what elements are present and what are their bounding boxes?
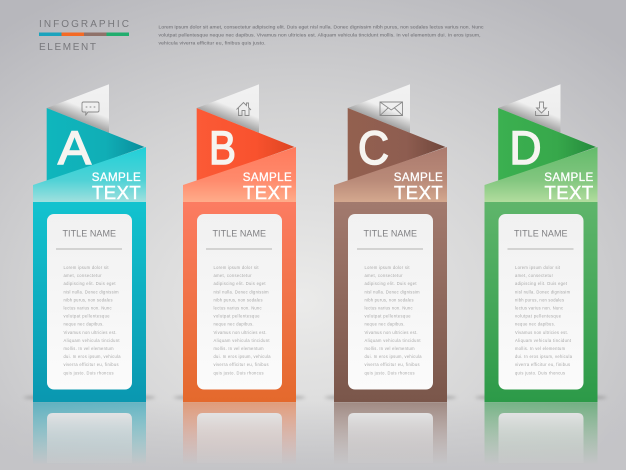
folded triangle (498, 108, 596, 182)
panel body text: Vivamus non ultricies est. (515, 330, 568, 335)
column A (24, 84, 156, 465)
panel body text: viverra efficitur eu, finibus (214, 362, 268, 367)
sample text: TEXT (243, 182, 292, 203)
panel body text: adipiscing elit. Duis eget (214, 281, 266, 286)
white text panel (348, 214, 433, 390)
intro paragraph: vehicula viverra efficitur eu, finibus quis justo. (158, 40, 266, 46)
body band (484, 202, 598, 402)
icon flag (47, 84, 109, 133)
panel body text: Lorem ipsum dolor sit (364, 265, 410, 270)
floor shadow (174, 395, 306, 400)
sample text: TEXT (544, 182, 593, 203)
panel title: TITLE NAME (364, 228, 417, 238)
floor shadow (24, 395, 156, 400)
panel body text: Lorem ipsum dolor sit (515, 265, 561, 270)
panel body text (214, 265, 271, 375)
panel body text: volutpat pellentesque (515, 314, 562, 319)
white text panel (498, 214, 584, 390)
panel body text (515, 265, 573, 375)
column C (324, 84, 456, 465)
sample text (92, 171, 141, 203)
icon: download (536, 102, 548, 116)
body band (183, 202, 296, 402)
panel body text: adipiscing elit. Duis eget (64, 281, 116, 286)
floor shadow (324, 395, 456, 400)
reflection (484, 403, 598, 465)
intro paragraph: volutpat pellentesque neque nec dapibus. Vivamus non ultricies est. Aliquam vehicula tincidunt mollis. In vel elementum dui. In eros ipsum, (158, 32, 480, 38)
panel body text: dui. In eros ipsum, vehicula (515, 354, 573, 359)
panel body text: viverra efficitur eu, finibus (364, 362, 420, 367)
panel body text: lectus varius non. Nunc (64, 306, 112, 310)
panel body text: lectus varius non. Nunc (364, 306, 412, 310)
reflection (334, 403, 447, 465)
front fold (183, 147, 296, 202)
heading: infographic element: INFOGRAPHIC (39, 19, 129, 30)
folded triangle (197, 108, 294, 182)
letter C: C (358, 121, 389, 174)
panel body text: Aliquam vehicula tincidunt (214, 338, 270, 343)
panel body text: Vivamus non ultricies est. (214, 330, 266, 335)
panel body text: amet, consectetur (515, 273, 554, 278)
panel body text: adipiscing elit. Duis eget (515, 281, 568, 286)
panel body text: Aliquam vehicula tincidunt (364, 338, 421, 343)
sample text (544, 171, 593, 203)
panel body text: quis justo. Duis rhoncus (364, 370, 414, 375)
panel body text: viverra efficitur eu, finibus (515, 362, 570, 367)
icon flag (197, 84, 259, 133)
letter A: A (58, 121, 92, 174)
white text panel (47, 214, 132, 390)
column D (475, 84, 607, 465)
panel body text: lectus varius non. Nunc (214, 306, 262, 310)
panel body text: nibh purus, non sodales (64, 297, 112, 302)
heading: infographic element (39, 19, 129, 53)
icon flag (348, 84, 410, 133)
panel body text: amet, consectetur (64, 273, 102, 278)
colour bar (39, 32, 129, 36)
panel body text: neque nec dapibus. (214, 322, 254, 327)
intro paragraph (158, 24, 484, 46)
front fold (484, 147, 598, 202)
sample text (394, 171, 443, 203)
panel body text: dui. In eros ipsum, vehicula (214, 354, 271, 359)
panel body text (64, 265, 121, 375)
panel body text: volutpat pellentesque (364, 314, 411, 319)
white text panel (197, 214, 282, 390)
panel body text: nibh purus, non sodales (364, 297, 414, 302)
panel body text: Lorem ipsum dolor sit (64, 265, 109, 270)
sample text: SAMPLE (394, 171, 443, 184)
folded triangle (47, 108, 145, 182)
reflection (183, 403, 296, 465)
panel body text: quis justo. Duis rhoncus (214, 370, 264, 375)
letter B: B (209, 121, 236, 174)
body band (33, 202, 146, 402)
body band (334, 202, 447, 402)
icon: envelope (380, 102, 402, 116)
front fold (33, 147, 146, 202)
panel body text: viverra efficitur eu, finibus (64, 362, 118, 367)
panel body text: Lorem ipsum dolor sit (214, 265, 259, 270)
icon: house (236, 102, 251, 116)
panel body text: quis justo. Duis rhoncus (64, 370, 114, 375)
panel body text: dui. In eros ipsum, vehicula (64, 354, 121, 359)
sample text (243, 171, 292, 203)
panel body text: mollis. In vel elementum (214, 346, 264, 351)
sample text: SAMPLE (243, 171, 292, 184)
sample text: SAMPLE (544, 171, 593, 184)
panel body text: neque nec dapibus. (364, 322, 404, 327)
panel body text: mollis. In vel elementum (64, 346, 114, 351)
panel body text: Aliquam vehicula tincidunt (515, 338, 572, 343)
folded triangle (348, 108, 446, 182)
panel title: TITLE NAME (212, 228, 266, 238)
panel body text: nibh purus, non sodales (214, 297, 262, 302)
intro paragraph: Lorem ipsum dolor sit amet, consectetur adipiscing elit. Duis eget nisl nulla. Donec dignissim nibh purus, non sodales lectus varius non. Nunc (158, 24, 484, 30)
panel body text: neque nec dapibus. (64, 322, 104, 327)
panel body text: lectus varius non. Nunc (515, 306, 563, 310)
reflection (33, 403, 146, 465)
panel body text: Vivamus non ultricies est. (64, 330, 116, 335)
panel body text: nisl nulla. Donec dignissim (515, 289, 571, 294)
panel title: TITLE NAME (62, 228, 116, 238)
panel body text: amet, consectetur (214, 273, 252, 278)
letter D: D (510, 121, 542, 174)
panel body text: neque nec dapibus. (515, 322, 555, 327)
panel body text: quis justo. Duis rhoncus (515, 370, 565, 375)
panel body text: Vivamus non ultricies est. (364, 330, 418, 335)
floor shadow (475, 395, 607, 400)
column B (174, 84, 306, 465)
panel body text: dui. In eros ipsum, vehicula (364, 354, 422, 359)
panel body text: nisl nulla. Donec dignissim (214, 289, 269, 294)
panel body text: nisl nulla. Donec dignissim (364, 289, 420, 294)
panel body text (364, 265, 422, 375)
front fold (334, 147, 447, 202)
sample text: TEXT (394, 182, 443, 203)
panel body text: Aliquam vehicula tincidunt (64, 338, 120, 343)
panel body text: adipiscing elit. Duis eget (364, 281, 417, 286)
heading: infographic element: ELEMENT (39, 42, 96, 53)
panel body text: volutpat pellentesque (214, 314, 260, 319)
panel body text: mollis. In vel elementum (364, 346, 415, 351)
icon flag (498, 84, 560, 133)
panel body text: nisl nulla. Donec dignissim (64, 289, 119, 294)
panel title: TITLE NAME (514, 228, 568, 238)
icon: chat bubble (82, 102, 99, 116)
panel body text: nibh purus, non sodales (515, 297, 564, 302)
sample text: TEXT (92, 182, 141, 203)
panel body text: amet, consectetur (364, 273, 403, 278)
panel body text: mollis. In vel elementum (515, 346, 566, 351)
sample text: SAMPLE (92, 171, 141, 184)
panel body text: volutpat pellentesque (64, 314, 110, 319)
